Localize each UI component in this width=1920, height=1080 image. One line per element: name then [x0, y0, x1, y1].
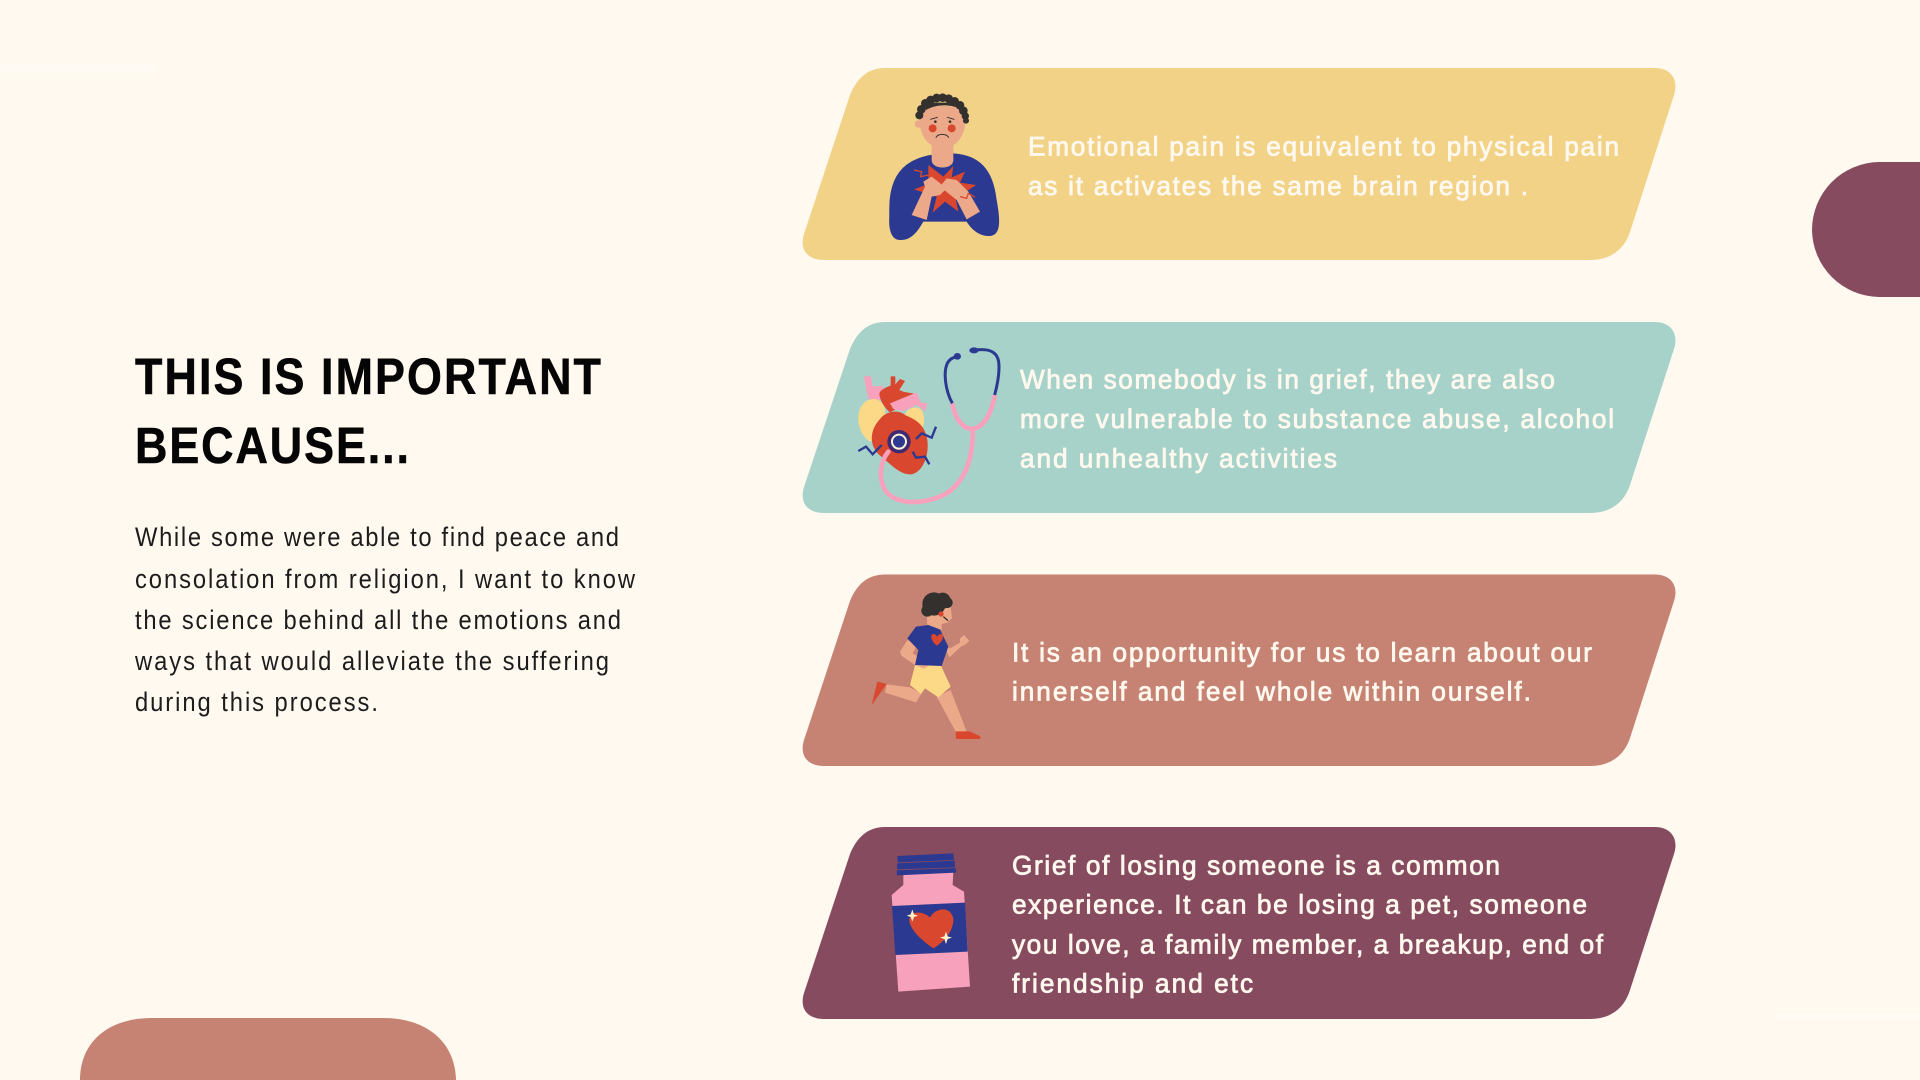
decorative brown tab, bottom left: [80, 1018, 456, 1080]
card text: [1012, 637, 1592, 707]
card text: as it activates the same brain region .: [1028, 171, 1528, 201]
panel: opportunity to learn: [803, 574, 1675, 766]
card text: experience. It can be losing a pet, someone: [1012, 889, 1587, 920]
decorative maroon tab, right edge: [1812, 162, 1920, 297]
icon: running man: [872, 592, 981, 739]
card text: and unhealthy activities: [1020, 443, 1337, 474]
card text: Grief of losing someone is a common: [1012, 850, 1500, 881]
panel: vulnerable to substance abuse: [803, 322, 1675, 513]
title: [135, 349, 601, 475]
body text: ways that would alleviate the suffering: [134, 647, 609, 676]
card text: more vulnerable to substance abuse, alcohol: [1020, 404, 1614, 434]
body text: during this process.: [135, 688, 378, 717]
card text: you love, a family member, a breakup, end of: [1012, 929, 1604, 960]
icon: heart medicine bottle: [892, 853, 970, 992]
title: THIS IS IMPORTANT: [135, 349, 601, 406]
icon: man with chest pain: [889, 93, 999, 240]
title: BECAUSE...: [135, 418, 409, 475]
card text: It is an opportunity for us to learn about our: [1012, 637, 1592, 668]
panel: emotional pain: [803, 68, 1675, 260]
card text: [1012, 850, 1604, 999]
card text: Emotional pain is equivalent to physical pain: [1028, 131, 1619, 162]
body text: While some were able to find peace and: [135, 523, 619, 552]
panel: grief of losing someone: [803, 827, 1675, 1019]
body text: the science behind all the emotions and: [135, 606, 621, 635]
card text: [1028, 131, 1619, 201]
card text: When somebody is in grief, they are also: [1020, 364, 1555, 395]
icon: heart and stethoscope: [858, 347, 999, 502]
body text: [134, 523, 636, 717]
card text: innerself and feel whole within ourself.: [1012, 676, 1531, 707]
body text: consolation from religion, I want to know: [135, 565, 636, 594]
card text: [1020, 364, 1614, 474]
card text: friendship and etc: [1012, 968, 1253, 999]
